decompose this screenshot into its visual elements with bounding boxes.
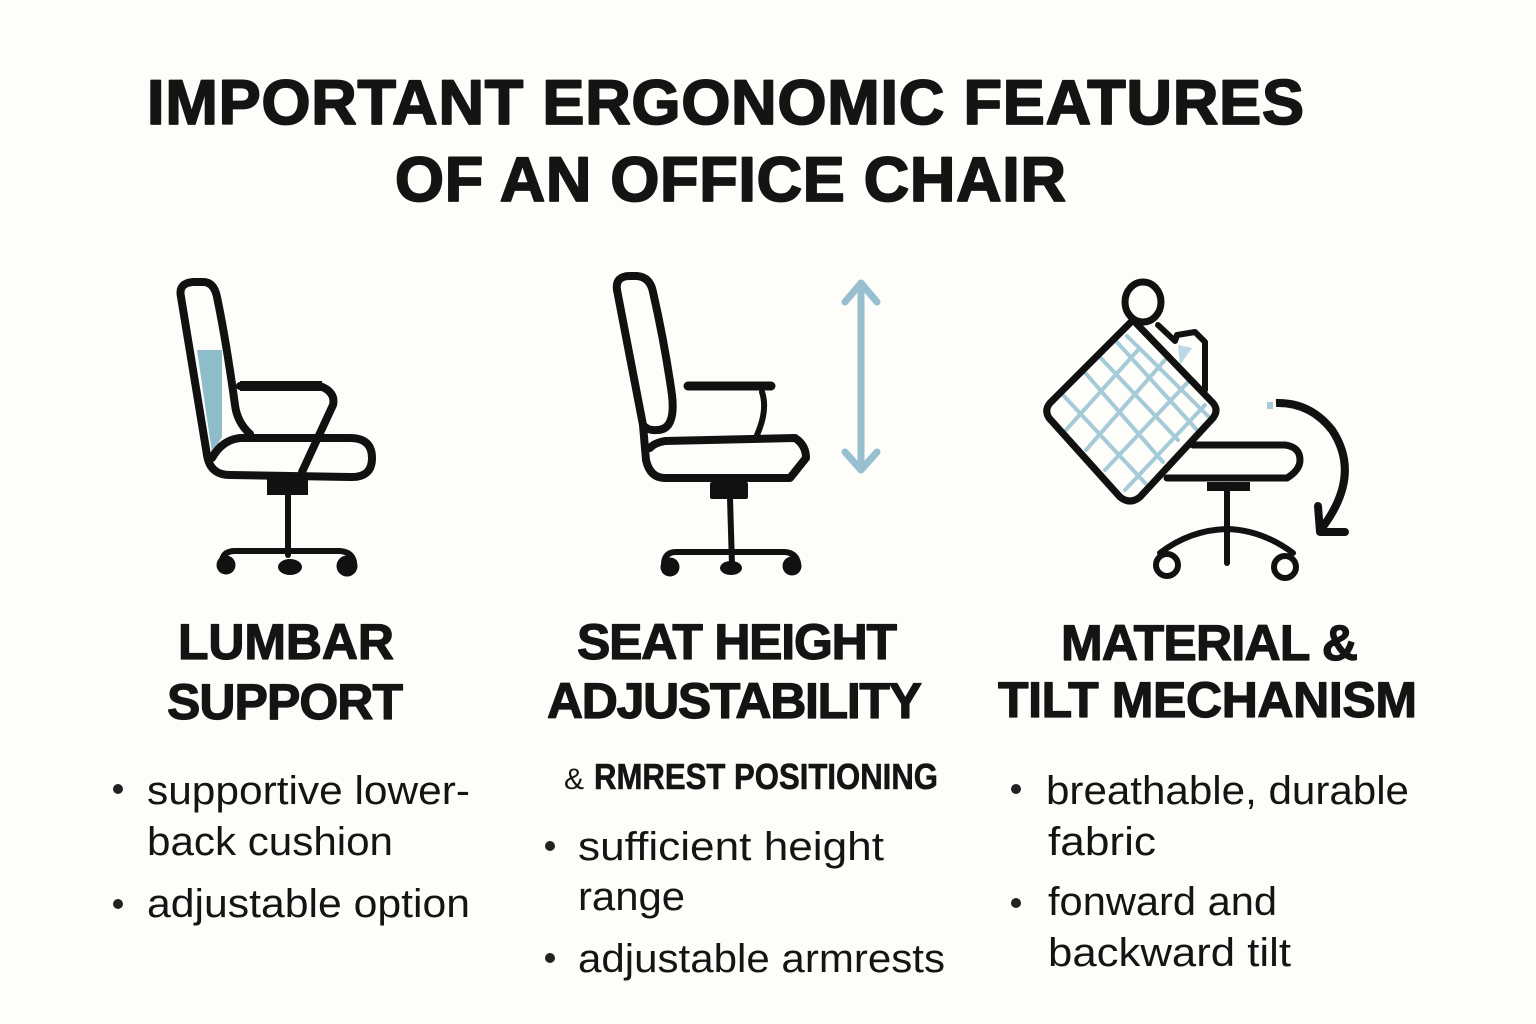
heading	[547, 614, 922, 729]
bullet list: adjustable armrests	[578, 937, 945, 981]
subheading: RMREST POSITIONING	[594, 756, 938, 797]
blue wash behind backrest	[1178, 345, 1200, 385]
icon: chair with mesh back and tilt	[1046, 282, 1345, 578]
title: IMPORTANT ERGONOMIC FEATURES	[147, 68, 1304, 138]
bullet list: supportive lower-	[147, 769, 470, 813]
mesh backrest panel	[1046, 320, 1217, 501]
title	[147, 68, 1304, 215]
heading: ADJUSTABILITY	[547, 673, 922, 729]
icon: chair with lumbar support	[180, 282, 372, 576]
panel: seat height adjustability	[545, 614, 945, 981]
heading	[167, 614, 403, 730]
bullet list	[113, 769, 470, 926]
bullet list	[545, 825, 945, 981]
bullet list: sufficient height	[578, 825, 884, 869]
bullet list: breathable, durable	[1046, 769, 1409, 813]
bullet list	[1011, 769, 1409, 975]
arrow: height adjustment	[845, 283, 877, 470]
heading: SUPPORT	[167, 674, 403, 730]
panel: material and tilt mechanism	[998, 615, 1417, 975]
heading: MATERIAL &	[1061, 615, 1358, 671]
subheading: &	[564, 763, 584, 796]
lumbar cushion highlight	[197, 350, 222, 453]
bullet list: adjustable option	[147, 882, 470, 926]
tilt arrow	[1267, 402, 1345, 532]
heading: SEAT HEIGHT	[577, 614, 897, 670]
bullet list: range	[578, 875, 685, 919]
heading: TILT MECHANISM	[998, 672, 1417, 728]
bullet list: back cushion	[147, 820, 393, 864]
title: OF AN OFFICE CHAIR	[395, 145, 1066, 215]
panel: lumbar support	[113, 614, 470, 926]
bullet list: fonward and	[1048, 880, 1277, 924]
bullet list: backward tilt	[1048, 931, 1291, 975]
heading	[998, 615, 1417, 728]
heading: LUMBAR	[178, 614, 394, 670]
bullet list: fabric	[1048, 820, 1156, 864]
icon: chair with seat height	[617, 276, 806, 576]
